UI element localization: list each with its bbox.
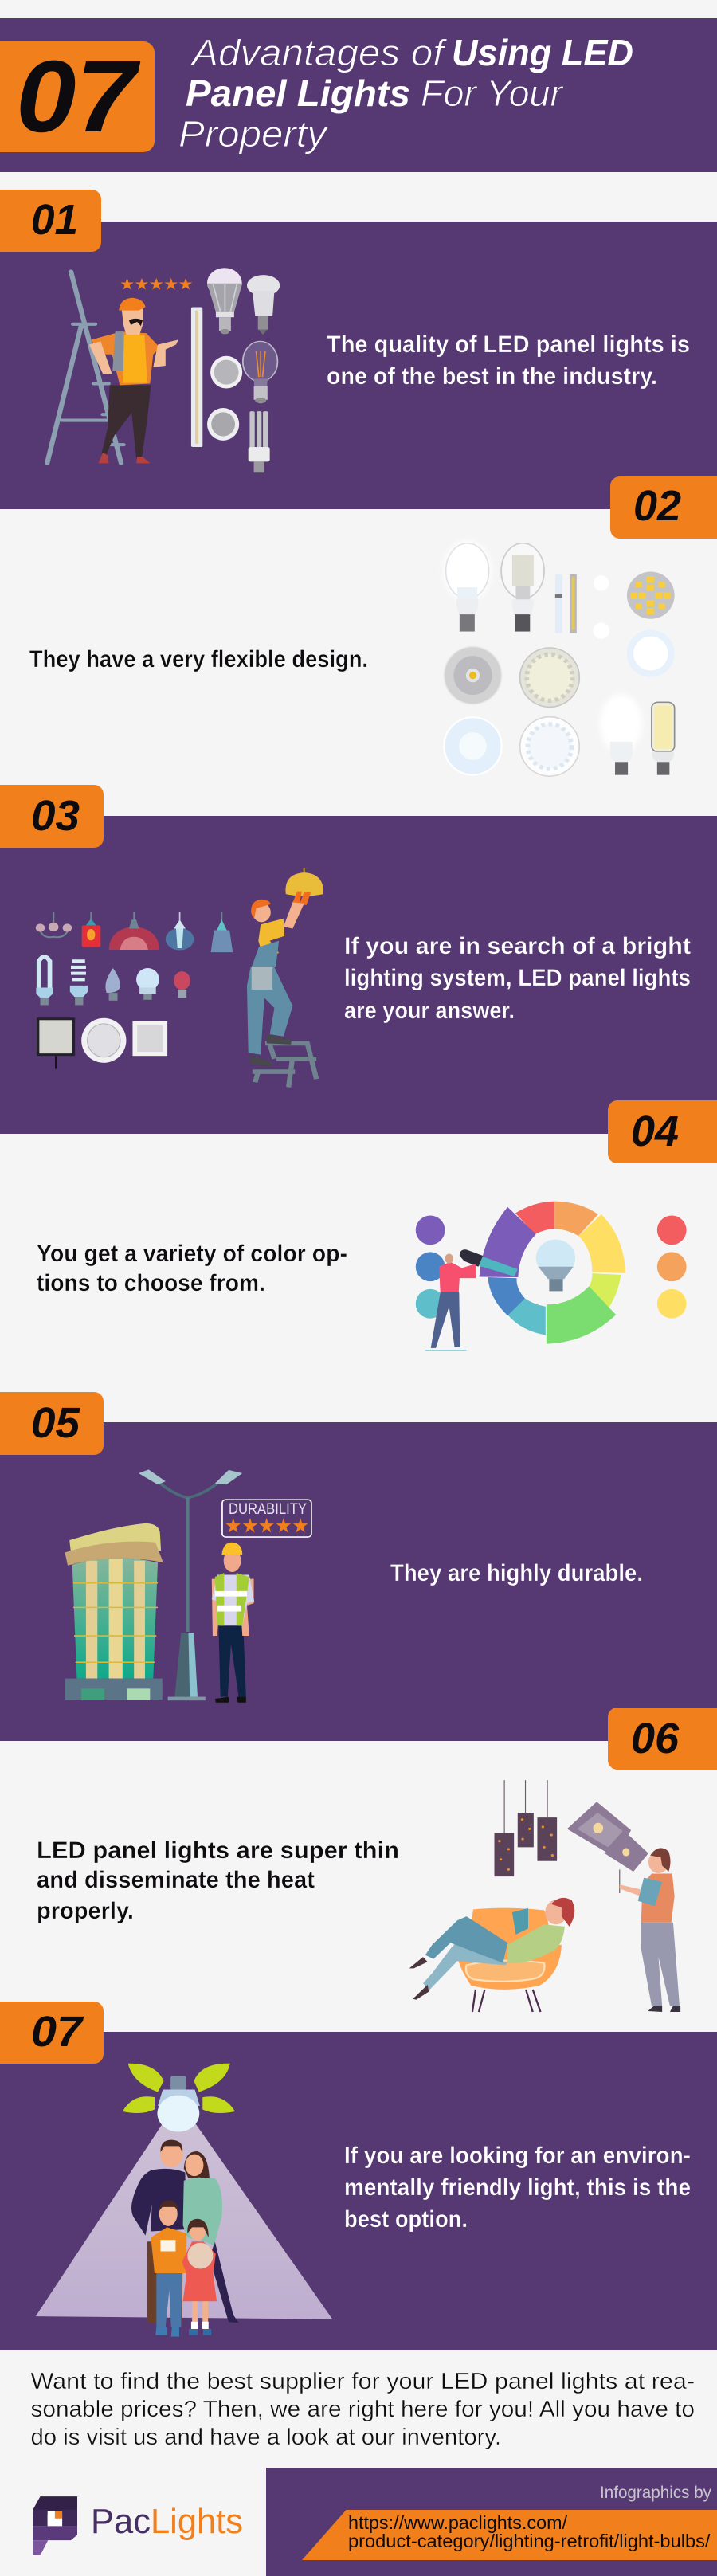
- text: advantage 7: [344, 2143, 691, 2233]
- illustration: bulb with leaves lighting a family: [36, 2064, 332, 2337]
- text: advantage 3: are your answer.: [344, 998, 515, 1024]
- illustration: LED bulbs and discs: [444, 541, 675, 776]
- text: advantage 5: They are highly durable.: [390, 1560, 643, 1586]
- badge 01: 01: [31, 196, 78, 244]
- text: advantage 7: If you are looking for an environ-: [344, 2143, 691, 2169]
- title: For Your: [421, 73, 564, 114]
- illustration: pendant lamps, woman reading in chair and woman standing: [409, 1780, 680, 2012]
- logo: PacLights: Lights: [151, 2502, 243, 2541]
- title: [178, 32, 633, 155]
- text: advantage 4: [37, 1241, 347, 1296]
- banner: website url: [302, 2510, 717, 2560]
- panel: section 1 background: [0, 222, 717, 509]
- illustration: colour wheel with person and dropper: [416, 1202, 687, 1351]
- text: advantage 3: [344, 933, 691, 1024]
- banner: website url: https://www.paclights.com/: [348, 2512, 568, 2533]
- closing text: [30, 2369, 695, 2450]
- badge 06: 06: [631, 1715, 680, 1762]
- banner: website url: product-category/lighting-retrofit/light-bulbs/: [348, 2531, 711, 2551]
- badge 05: 05: [31, 1399, 80, 1447]
- badge 03: 03: [31, 792, 80, 840]
- text: advantage 7: mentally friendly light, this is the: [344, 2174, 691, 2201]
- closing text: do is visit us and have a look at our inventory.: [30, 2425, 501, 2450]
- badge 01: [0, 190, 101, 252]
- text: advantage 1: [327, 331, 690, 390]
- text: advantage 1: The quality of LED panel lights is: [327, 331, 690, 358]
- text: advantage 6: and disseminate the heat: [37, 1867, 315, 1893]
- text: advantage 6: LED panel lights are super thin: [37, 1837, 399, 1864]
- badge 04: 04: [631, 1108, 679, 1155]
- badge 04: [608, 1100, 717, 1163]
- badge 06: [608, 1708, 717, 1770]
- badge 03: [0, 785, 104, 848]
- text: advantage 7: best option.: [344, 2206, 468, 2233]
- title: Advantages of: [190, 32, 448, 73]
- label: durability: DURABILITY: [229, 1501, 307, 1518]
- text: advantage 2: They have a very flexible design.: [29, 646, 368, 672]
- logo: PacLights: Pac: [91, 2502, 151, 2541]
- title: Panel Lights: [186, 73, 410, 114]
- logo: PacLights: [33, 2496, 243, 2555]
- illustration: worker on ladder with LED bulbs: [47, 268, 280, 472]
- text: advantage 4: You get a variety of color op-: [37, 1241, 347, 1267]
- text: advantage 1: one of the best in the industry.: [327, 363, 657, 390]
- title: Using LED: [452, 32, 633, 73]
- closing text: sonable prices? Then, we are right here for you! All you have to: [30, 2397, 695, 2422]
- illustration: lamps grid and worker fitting a lamp: [36, 868, 323, 1087]
- title: Property: [178, 113, 329, 155]
- illustration: building, street lamp and engineer with durability rating: [65, 1469, 311, 1703]
- panel: section 5 background: [0, 1422, 717, 1741]
- panel: section 7 background: [0, 2032, 717, 2350]
- badge 07: [0, 2002, 104, 2064]
- panel: section 3 background: [0, 816, 717, 1134]
- text: advantage 3: If you are in search of a bright: [344, 933, 691, 959]
- text: advantage 6: properly.: [37, 1898, 134, 1924]
- header band: [0, 18, 717, 172]
- badge: big 07: 07: [16, 40, 141, 154]
- badge 05: [0, 1392, 104, 1455]
- text: advantage 4: tions to choose from.: [37, 1270, 265, 1296]
- closing text: Want to find the best supplier for your LED panel lights at rea-: [30, 2369, 695, 2394]
- badge 07: 07: [31, 2008, 84, 2056]
- panel: footer attribution: [266, 2468, 717, 2576]
- badge 02: 02: [633, 482, 681, 530]
- text: advantage 3: lighting system, LED panel lights: [344, 965, 691, 991]
- badge 02: [610, 476, 717, 539]
- label: infographics by: Infographics by: [600, 2484, 711, 2502]
- logo icon: [33, 2496, 77, 2555]
- text: advantage 6: [37, 1837, 399, 1924]
